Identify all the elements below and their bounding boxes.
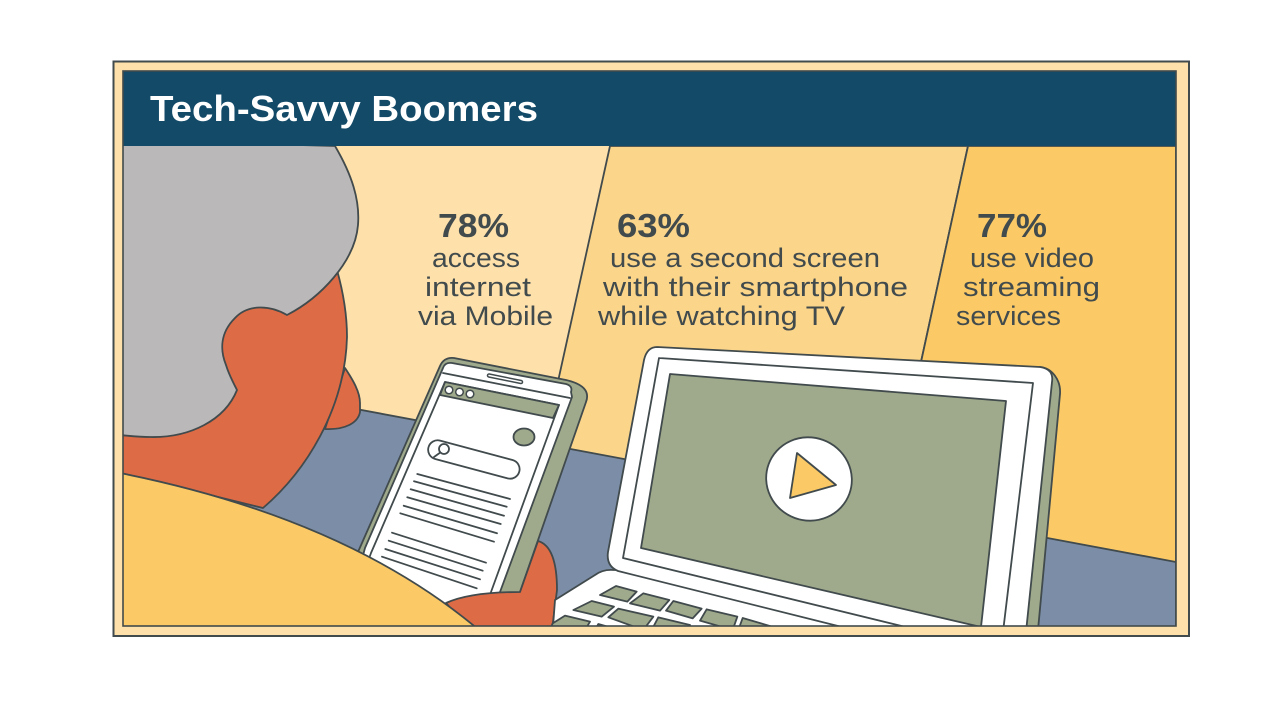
icon: grey hair bbox=[120, 140, 358, 437]
panel: second screen background bbox=[558, 146, 967, 458]
phone body bbox=[358, 357, 588, 592]
icon: yellow shoulder bbox=[120, 473, 479, 630]
icon: person's nose bbox=[325, 368, 360, 429]
stat: 78% access internet via mobile bbox=[418, 207, 553, 331]
illustration scene bbox=[120, 140, 1176, 640]
icon: laptop bbox=[550, 347, 1060, 640]
panel: mobile internet background bbox=[123, 146, 610, 640]
phone top line bbox=[443, 373, 570, 398]
stat: 77% use video streaming services: streaming bbox=[963, 272, 1100, 302]
browser dots bbox=[445, 386, 474, 398]
phone speaker bbox=[489, 376, 521, 382]
browser bar bbox=[440, 382, 559, 418]
stat: 63% use a second screen: 63% bbox=[617, 207, 690, 244]
laptop keyboard base bbox=[552, 569, 832, 626]
stat: 63% use a second screen: while watching TV bbox=[597, 301, 845, 331]
inner frame border bbox=[123, 71, 1176, 626]
icon: person's face and neck bbox=[120, 270, 347, 508]
play triangle bbox=[790, 453, 836, 498]
title banner bbox=[123, 71, 1176, 146]
panel: video streaming background bbox=[920, 146, 1176, 561]
green profile dot bbox=[514, 428, 534, 446]
play button circle bbox=[765, 436, 853, 522]
stat: 77% use video streaming services: 77% bbox=[977, 207, 1047, 244]
stat: 77% use video streaming services: services bbox=[956, 301, 1061, 331]
stat: 78% access internet via mobile: access bbox=[432, 243, 520, 273]
laptop bezel line bbox=[623, 358, 1033, 632]
text lines on phone bbox=[382, 474, 510, 588]
stat: 63% use a second screen bbox=[597, 207, 908, 331]
stat: 78% access internet via mobile: internet bbox=[425, 272, 532, 302]
outer frame bbox=[114, 62, 1189, 636]
blue table surface bbox=[244, 409, 1176, 626]
phone screen bbox=[369, 381, 560, 592]
title: Tech-Savvy Boomers bbox=[150, 88, 538, 129]
stat: 63% use a second screen: use a second screen bbox=[610, 243, 880, 273]
search icon bbox=[434, 444, 449, 457]
laptop lid back bbox=[1028, 366, 1061, 626]
laptop keys bbox=[550, 585, 771, 626]
stat: 63% use a second screen: with their smartphone bbox=[602, 272, 908, 302]
laptop screen bbox=[641, 374, 1006, 627]
laptop lid bbox=[608, 347, 1052, 632]
stat: 77% use video streaming services bbox=[956, 207, 1100, 331]
search pill bbox=[426, 438, 522, 481]
stat: 77% use video streaming services: use video bbox=[970, 243, 1094, 273]
stat: 78% access internet via mobile: 78% bbox=[438, 207, 509, 244]
infographic bbox=[112, 60, 1190, 637]
icon: hand holding phone bbox=[446, 541, 557, 630]
icon: smartphone bbox=[358, 357, 588, 603]
phone face bbox=[362, 362, 573, 592]
stat: 78% access internet via mobile: via Mobile bbox=[418, 301, 553, 331]
